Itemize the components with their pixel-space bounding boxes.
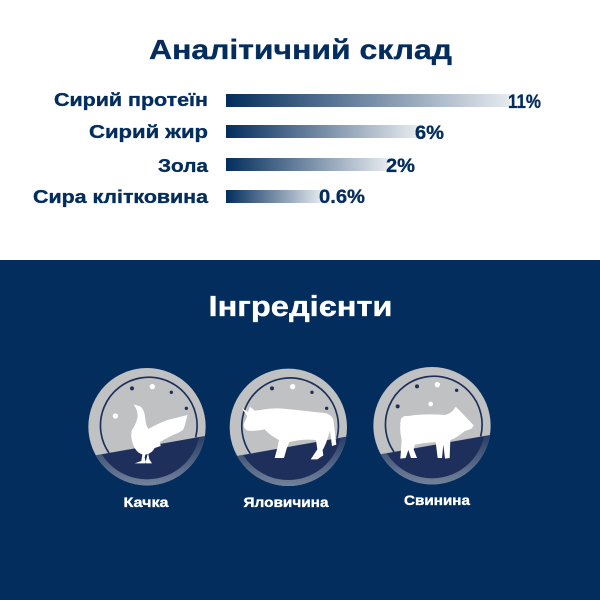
row: crude fat: 6% (415, 123, 444, 144)
row: crude fat (89, 122, 444, 144)
row: crude fibre: 0.6% (319, 187, 365, 208)
ingredients heading: Інгредієнти (208, 291, 392, 323)
icon: duck (88, 368, 206, 486)
row: crude fat: Сирий жир (89, 122, 208, 142)
icon: pork (373, 367, 491, 484)
label: beef: Яловичина (244, 494, 329, 510)
row: crude protein (54, 90, 541, 113)
row: crude protein: 11% (508, 92, 541, 113)
row: crude fibre: Сира клітковина (33, 187, 209, 207)
row: crude protein: Сирий протеїн (54, 90, 208, 110)
row: crude fibre (33, 187, 365, 208)
ingredients panel (0, 260, 600, 600)
row: ash: 2% (386, 156, 415, 177)
row: ash (158, 156, 415, 177)
label: duck: Качка (124, 494, 169, 510)
icon: beef (230, 368, 347, 486)
row: ash: Зола (158, 156, 209, 176)
title: Аналітичний склад (149, 34, 452, 65)
label: pork: Свинина (404, 492, 470, 508)
